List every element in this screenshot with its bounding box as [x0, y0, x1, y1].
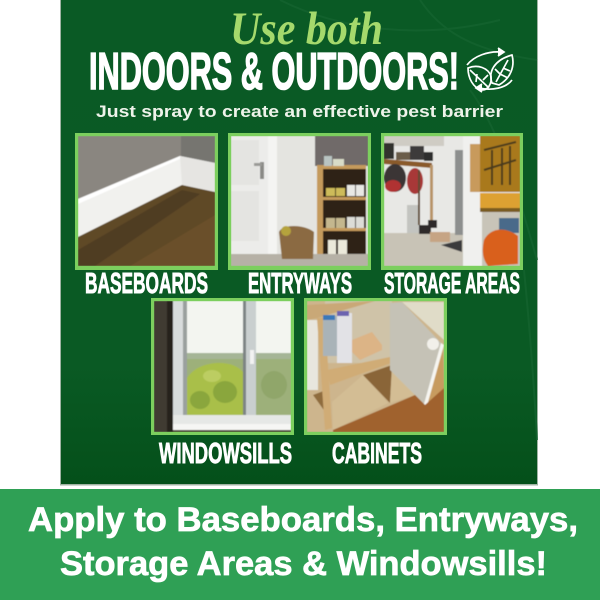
- panel: storage areas photo: [381, 133, 523, 270]
- icon: leaves with recycling arrows: [467, 48, 513, 92]
- heading: Use both: Use both: [230, 3, 383, 55]
- label: windowsills: WINDOWSILLS: [159, 438, 292, 470]
- label: entryways: ENTRYWAYS: [248, 268, 352, 300]
- panel: baseboards photo: [75, 133, 218, 270]
- panel: cabinets photo: [304, 298, 447, 435]
- label: cabinets: CABINETS: [332, 438, 422, 470]
- panel: entryways photo: [228, 133, 371, 270]
- panel: windowsills photo: [151, 298, 294, 435]
- banner text line 1: Apply to Baseboards, Entryways,: [28, 501, 578, 539]
- panel: bottom banner: [0, 489, 600, 600]
- banner text line 2: Storage Areas & Windowsills!: [60, 545, 547, 583]
- subtitle: Just spray to create an effective pest barrier: [96, 102, 503, 121]
- panel: green background: [60, 0, 538, 486]
- label: baseboards: BASEBOARDS: [85, 268, 208, 300]
